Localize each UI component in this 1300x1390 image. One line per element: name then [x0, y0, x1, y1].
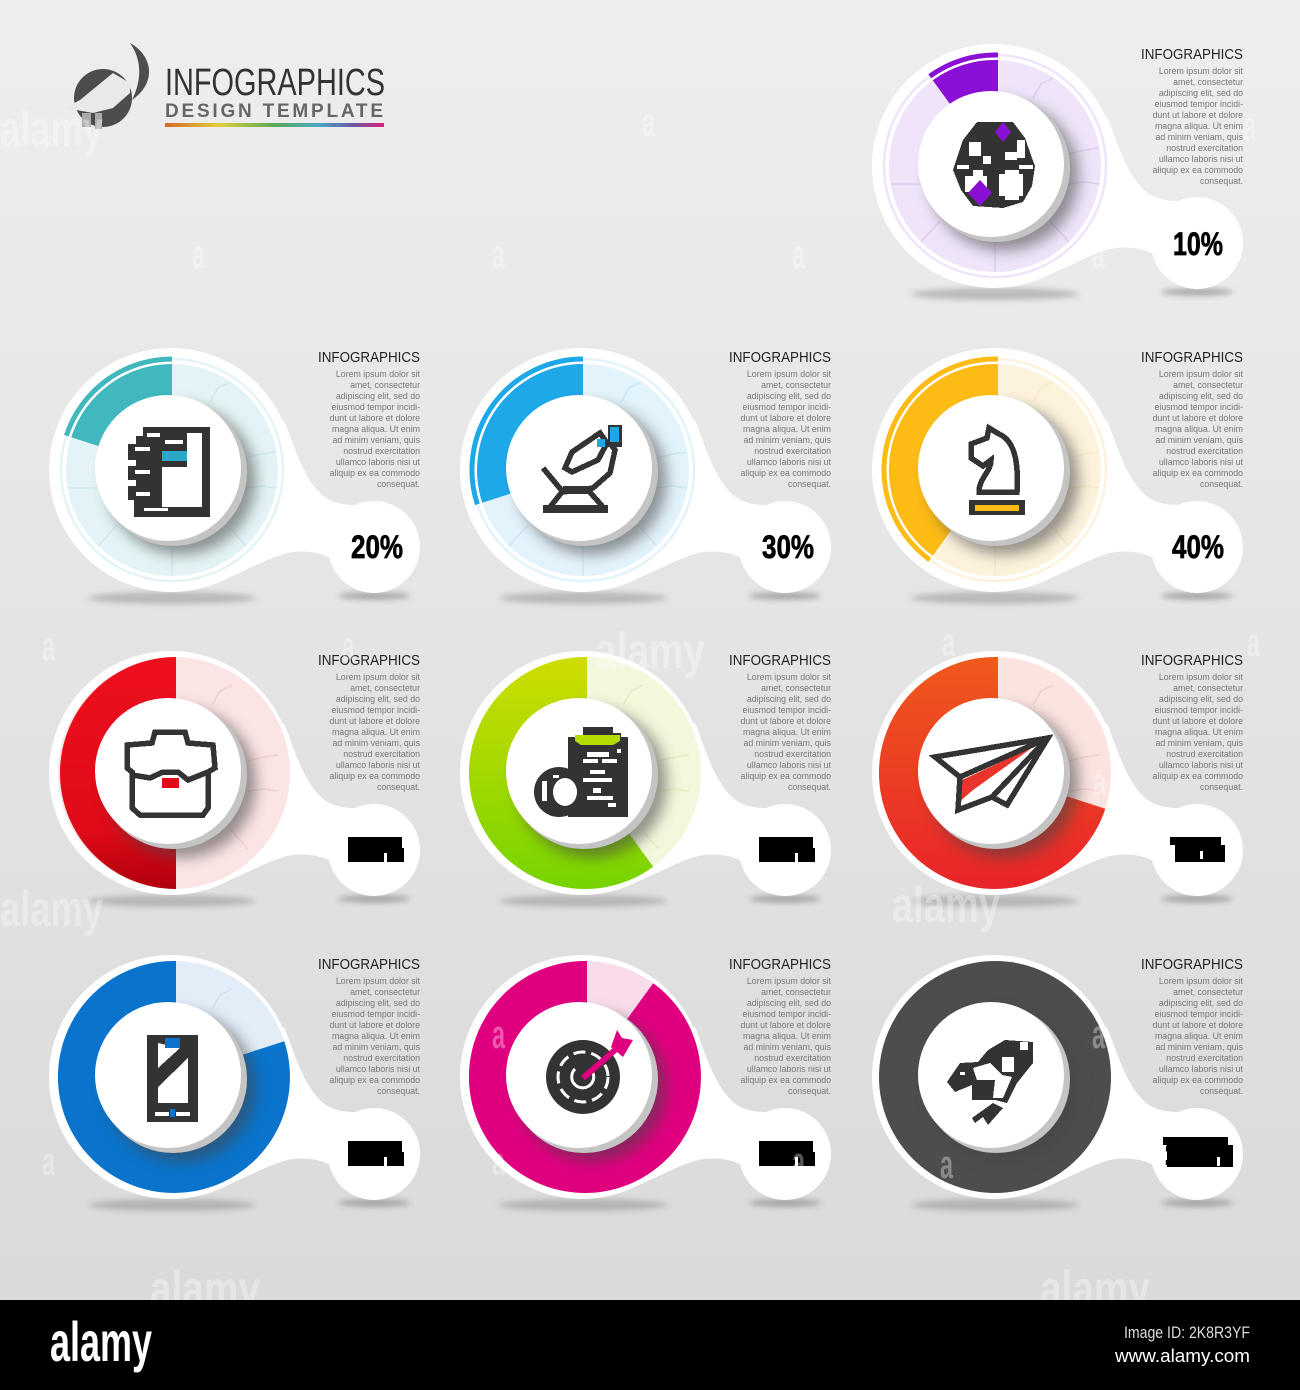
body text: ad minim veniam, quis: [743, 738, 832, 748]
logo rainbow bar: [165, 123, 384, 127]
body text: Lorem ipsum dolor sit: [1159, 976, 1244, 986]
footer logo: alamy: [50, 1310, 152, 1373]
body text: ad minim veniam, quis: [332, 738, 421, 748]
body text: adipiscing elit, sed do: [747, 391, 831, 401]
body text: amet, consectetur: [1173, 380, 1243, 390]
card: 40%: [872, 348, 1244, 604]
body text: Lorem ipsum dolor sit: [336, 369, 421, 379]
body text: adipiscing elit, sed do: [336, 998, 420, 1008]
body text: ad minim veniam, quis: [1155, 132, 1244, 142]
body text: aliquip ex ea commodo: [741, 1075, 831, 1085]
logo icon: [65, 43, 149, 129]
body text: consequat.: [377, 1086, 420, 1096]
body text: magna aliqua. Ut enim: [1155, 121, 1243, 131]
body text: consequat.: [1200, 782, 1243, 792]
body text: aliquip ex ea commodo: [1153, 771, 1243, 781]
body text: consequat.: [788, 782, 831, 792]
donut chart: 30%: [472, 359, 694, 581]
body text: adipiscing elit, sed do: [747, 998, 831, 1008]
watermarks: alamy: [150, 1261, 260, 1317]
body text: consequat.: [788, 479, 831, 489]
body text: ad minim veniam, quis: [1155, 738, 1244, 748]
donut chart: 60%: [469, 657, 701, 889]
body text: dunt ut labore et dolore: [741, 716, 831, 726]
card: 80%: [49, 955, 421, 1211]
card: 60%: [460, 651, 832, 907]
body text: aliquip ex ea commodo: [1153, 468, 1243, 478]
body text: aliquip ex ea commodo: [741, 468, 831, 478]
icon: rocket: [947, 1040, 1033, 1125]
body text: magna aliqua. Ut enim: [332, 424, 420, 434]
donut chart: 50%: [58, 657, 290, 889]
donut chart: 80%: [58, 961, 290, 1193]
body text: consequat.: [377, 479, 420, 489]
watermarks: alamy: [892, 877, 1000, 933]
percentage: 70%: [1174, 834, 1224, 867]
icon: target with dart: [546, 1030, 633, 1114]
body text: nostrud exercitation: [1166, 1053, 1243, 1063]
body text: ullamco laboris nisi ut: [747, 1064, 832, 1074]
body text: adipiscing elit, sed do: [1159, 998, 1243, 1008]
body text: eiusmod tempor incidi-: [1154, 1009, 1243, 1019]
watermarks: a: [192, 233, 205, 277]
icon: brain: [953, 122, 1035, 208]
body text: aliquip ex ea commodo: [330, 1075, 420, 1085]
body text: consequat.: [377, 782, 420, 792]
body text: Lorem ipsum dolor sit: [1159, 66, 1244, 76]
watermarks: alamy: [1040, 1261, 1150, 1317]
body text: aliquip ex ea commodo: [741, 771, 831, 781]
watermarks: a: [342, 625, 355, 669]
card: 70%: [872, 651, 1244, 907]
heading: INFOGRAPHICS: [729, 956, 831, 973]
body text: magna aliqua. Ut enim: [743, 727, 831, 737]
body text: Lorem ipsum dolor sit: [1159, 369, 1244, 379]
watermarks: a: [492, 1140, 505, 1184]
body text: eiusmod tempor incidi-: [332, 402, 420, 412]
donut chart: 40%: [884, 359, 1106, 581]
heading: INFOGRAPHICS: [318, 652, 420, 669]
watermarks: a: [792, 1140, 805, 1184]
watermarks: a: [1243, 105, 1256, 149]
body text: Lorem ipsum dolor sit: [747, 672, 832, 682]
heading: INFOGRAPHICS: [318, 956, 420, 973]
body text: ad minim veniam, quis: [332, 435, 421, 445]
body text: nostrud exercitation: [1166, 143, 1243, 153]
body text: ad minim veniam, quis: [332, 1042, 421, 1052]
body text: ad minim veniam, quis: [743, 1042, 832, 1052]
body text: ullamco laboris nisi ut: [336, 1064, 421, 1074]
percentage: 50%: [350, 834, 402, 867]
body text: ullamco laboris nisi ut: [336, 760, 421, 770]
body text: adipiscing elit, sed do: [1159, 391, 1243, 401]
body text: amet, consectetur: [761, 987, 831, 997]
percentage: 80%: [350, 1138, 402, 1171]
icon: paper plane: [935, 738, 1048, 810]
body text: adipiscing elit, sed do: [1159, 88, 1243, 98]
body text: adipiscing elit, sed do: [336, 391, 420, 401]
body text: nostrud exercitation: [343, 446, 420, 456]
watermarks: a: [642, 101, 655, 145]
percentage: 20%: [351, 529, 403, 565]
website: www.alamy.com: [1114, 1346, 1250, 1366]
body text: dunt ut labore et dolore: [741, 1020, 831, 1030]
body text: dunt ut labore et dolore: [741, 413, 831, 423]
watermarks: alamy: [0, 101, 103, 157]
donut chart: 70%: [879, 657, 1111, 889]
body text: magna aliqua. Ut enim: [743, 424, 831, 434]
watermarks: a: [492, 1013, 505, 1057]
heading: INFOGRAPHICS: [318, 349, 420, 366]
body text: Lorem ipsum dolor sit: [336, 672, 421, 682]
body text: dunt ut labore et dolore: [1153, 413, 1243, 423]
body text: nostrud exercitation: [1166, 446, 1243, 456]
heading: INFOGRAPHICS: [729, 652, 831, 669]
body text: adipiscing elit, sed do: [747, 694, 831, 704]
body text: ullamco laboris nisi ut: [1159, 154, 1244, 164]
body text: eiusmod tempor incidi-: [742, 705, 831, 715]
body text: amet, consectetur: [1173, 77, 1243, 87]
body text: nostrud exercitation: [1166, 749, 1243, 759]
body text: consequat.: [1200, 176, 1243, 186]
icon: microscope: [543, 425, 622, 513]
body text: magna aliqua. Ut enim: [743, 1031, 831, 1041]
donut chart: 100%: [879, 961, 1111, 1193]
body text: dunt ut labore et dolore: [1153, 110, 1243, 120]
heading: INFOGRAPHICS: [1141, 652, 1243, 669]
body text: consequat.: [1200, 479, 1243, 489]
body text: ad minim veniam, quis: [1155, 435, 1244, 445]
watermarks: a: [1092, 233, 1105, 277]
body text: nostrud exercitation: [754, 749, 831, 759]
body text: Lorem ipsum dolor sit: [1159, 672, 1244, 682]
heading: INFOGRAPHICS: [1141, 956, 1243, 973]
watermarks: a: [42, 625, 55, 669]
body text: amet, consectetur: [350, 683, 420, 693]
body text: eiusmod tempor incidi-: [1154, 99, 1243, 109]
watermarks: a: [792, 233, 805, 277]
body text: amet, consectetur: [761, 380, 831, 390]
logo: [65, 43, 385, 129]
body text: ullamco laboris nisi ut: [1159, 457, 1244, 467]
body text: magna aliqua. Ut enim: [1155, 1031, 1243, 1041]
percentage: 10%: [1173, 226, 1223, 262]
watermarks: a: [1093, 760, 1106, 804]
heading: INFOGRAPHICS: [729, 349, 831, 366]
icon: briefcase: [127, 732, 215, 815]
watermarks: a: [492, 233, 505, 277]
body text: ullamco laboris nisi ut: [1159, 1064, 1244, 1074]
icon: coins and stack: [534, 727, 628, 817]
body text: amet, consectetur: [761, 683, 831, 693]
donut chart: 90%: [469, 961, 701, 1193]
body text: amet, consectetur: [1173, 987, 1243, 997]
body text: magna aliqua. Ut enim: [332, 727, 420, 737]
watermarks: a: [1092, 1013, 1105, 1057]
body text: adipiscing elit, sed do: [336, 694, 420, 704]
image id: Image ID: 2K8R3YF: [1124, 1323, 1250, 1342]
watermarks: a: [940, 1143, 953, 1187]
body text: amet, consectetur: [1173, 683, 1243, 693]
percentage: 40%: [1172, 529, 1224, 565]
footer bar: [0, 1300, 1300, 1390]
body text: magna aliqua. Ut enim: [1155, 424, 1243, 434]
icon: notebook: [128, 427, 210, 517]
body text: aliquip ex ea commodo: [330, 468, 420, 478]
body text: nostrud exercitation: [343, 1053, 420, 1063]
body text: consequat.: [1200, 1086, 1243, 1096]
body text: aliquip ex ea commodo: [330, 771, 420, 781]
body text: eiusmod tempor incidi-: [1154, 402, 1243, 412]
body text: ullamco laboris nisi ut: [336, 457, 421, 467]
body text: eiusmod tempor incidi-: [742, 1009, 831, 1019]
watermarks: alamy: [0, 881, 103, 937]
body text: ullamco laboris nisi ut: [1159, 760, 1244, 770]
body text: aliquip ex ea commodo: [1153, 165, 1243, 175]
body text: Lorem ipsum dolor sit: [747, 976, 832, 986]
body text: magna aliqua. Ut enim: [332, 1031, 420, 1041]
body text: eiusmod tempor incidi-: [742, 402, 831, 412]
watermarks: alamy: [595, 623, 705, 679]
body text: ad minim veniam, quis: [743, 435, 832, 445]
logo title: INFOGRAPHICS: [165, 62, 385, 104]
body text: dunt ut labore et dolore: [330, 413, 420, 423]
donut chart: 10%: [884, 55, 1106, 277]
body text: eiusmod tempor incidi-: [332, 1009, 420, 1019]
percentage: 30%: [762, 529, 814, 565]
body text: dunt ut labore et dolore: [1153, 716, 1243, 726]
percentage: 60%: [761, 834, 813, 867]
card: 50%: [49, 651, 421, 907]
watermarks: a: [942, 621, 955, 665]
body text: magna aliqua. Ut enim: [1155, 727, 1243, 737]
body text: ullamco laboris nisi ut: [747, 760, 832, 770]
body text: dunt ut labore et dolore: [330, 1020, 420, 1030]
body text: amet, consectetur: [350, 987, 420, 997]
card: 100%: [872, 955, 1244, 1211]
body text: eiusmod tempor incidi-: [332, 705, 420, 715]
body text: aliquip ex ea commodo: [1153, 1075, 1243, 1085]
card: 20%: [49, 348, 421, 604]
card: 30%: [460, 348, 832, 604]
card: 10%: [872, 44, 1244, 300]
watermarks: a: [42, 1140, 55, 1184]
watermarks: a: [1247, 621, 1260, 665]
body text: nostrud exercitation: [754, 1053, 831, 1063]
icon: smartphone: [147, 1035, 198, 1122]
body text: dunt ut labore et dolore: [330, 716, 420, 726]
heading: INFOGRAPHICS: [1141, 349, 1243, 366]
donut chart: 20%: [61, 359, 283, 581]
body text: amet, consectetur: [350, 380, 420, 390]
body text: Lorem ipsum dolor sit: [747, 369, 832, 379]
body text: ad minim veniam, quis: [1155, 1042, 1244, 1052]
logo subtitle: DESIGN TEMPLATE: [165, 101, 383, 122]
body text: adipiscing elit, sed do: [1159, 694, 1243, 704]
icon: chess knight: [969, 428, 1025, 515]
heading: INFOGRAPHICS: [1141, 46, 1243, 63]
body text: dunt ut labore et dolore: [1153, 1020, 1243, 1030]
percentage: 90%: [761, 1138, 813, 1171]
body text: eiusmod tempor incidi-: [1154, 705, 1243, 715]
body text: ullamco laboris nisi ut: [747, 457, 832, 467]
body text: nostrud exercitation: [343, 749, 420, 759]
body text: consequat.: [788, 1086, 831, 1096]
body text: Lorem ipsum dolor sit: [336, 976, 421, 986]
percentage: 100%: [1165, 1138, 1231, 1171]
body text: nostrud exercitation: [754, 446, 831, 456]
card: 90%: [460, 955, 832, 1211]
